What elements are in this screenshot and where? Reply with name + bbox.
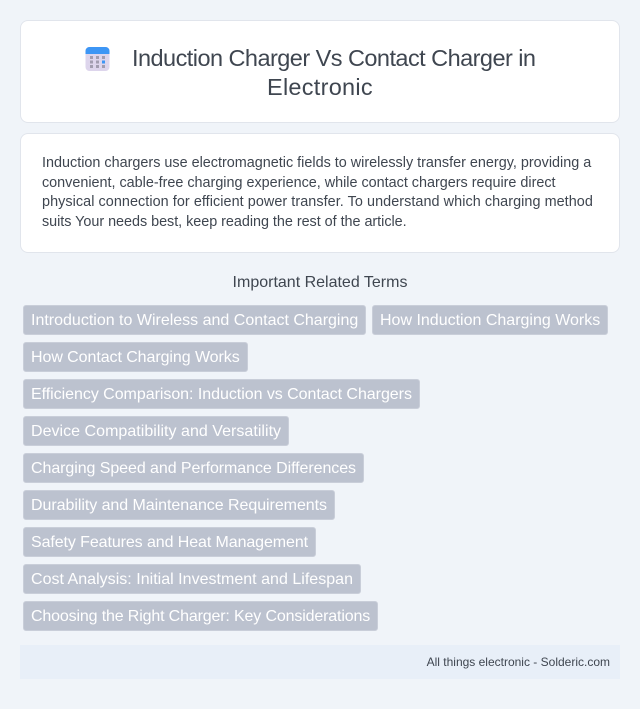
footer: All things electronic - Solderic.com bbox=[427, 655, 610, 669]
text block: introduction: convenient, cable-free charging experience, while contact chargers require direct bbox=[42, 174, 556, 190]
tag: compatibility: Device Compatibility and Versatility bbox=[31, 423, 281, 440]
heading: related terms: Important Related Terms bbox=[233, 274, 407, 291]
tag: safety: Safety Features and Heat Management bbox=[31, 534, 308, 551]
tag: efficiency bbox=[23, 379, 420, 409]
tag: efficiency: Efficiency Comparison: Induction vs Contact Chargers bbox=[31, 386, 412, 403]
tag: contact charging bbox=[23, 342, 248, 372]
title bbox=[132, 45, 535, 100]
text block: introduction bbox=[42, 155, 593, 230]
tag: contact charging: How Contact Charging Works bbox=[31, 349, 240, 366]
tag: introduction bbox=[23, 305, 366, 335]
title: Electronic bbox=[267, 74, 373, 100]
tag: induction charging: How Induction Charging Works bbox=[380, 312, 600, 329]
tag: safety bbox=[23, 527, 316, 557]
tag: compatibility bbox=[23, 416, 289, 446]
text block: introduction: suits Your needs best, keep reading the rest of the article. bbox=[42, 214, 407, 230]
panel: title card bbox=[20, 20, 620, 123]
footer bbox=[20, 645, 620, 679]
title: Induction Charger Vs Contact Charger in bbox=[132, 45, 535, 71]
text block: introduction: physical connection for efficient power transfer. To understand which charging method bbox=[42, 194, 593, 210]
panel: introduction bbox=[20, 133, 620, 253]
icon: calendar app bbox=[86, 47, 110, 71]
text block: introduction: Induction chargers use electromagnetic fields to wirelessly transfer energy, providing a bbox=[42, 155, 591, 171]
tag: durability: Durability and Maintenance Requirements bbox=[31, 497, 327, 514]
tag: cost: Cost Analysis: Initial Investment and Lifespan bbox=[31, 571, 353, 588]
tag: cost bbox=[23, 564, 361, 594]
tag: durability bbox=[23, 490, 335, 520]
tag: speed: Charging Speed and Performance Differences bbox=[31, 460, 356, 477]
tag: induction charging bbox=[372, 305, 608, 335]
tag: introduction: Introduction to Wireless and Contact Charging bbox=[31, 312, 358, 329]
tag: choosing: Choosing the Right Charger: Key Considerations bbox=[31, 608, 370, 625]
tag: speed bbox=[23, 453, 364, 483]
tag: choosing bbox=[23, 601, 378, 631]
